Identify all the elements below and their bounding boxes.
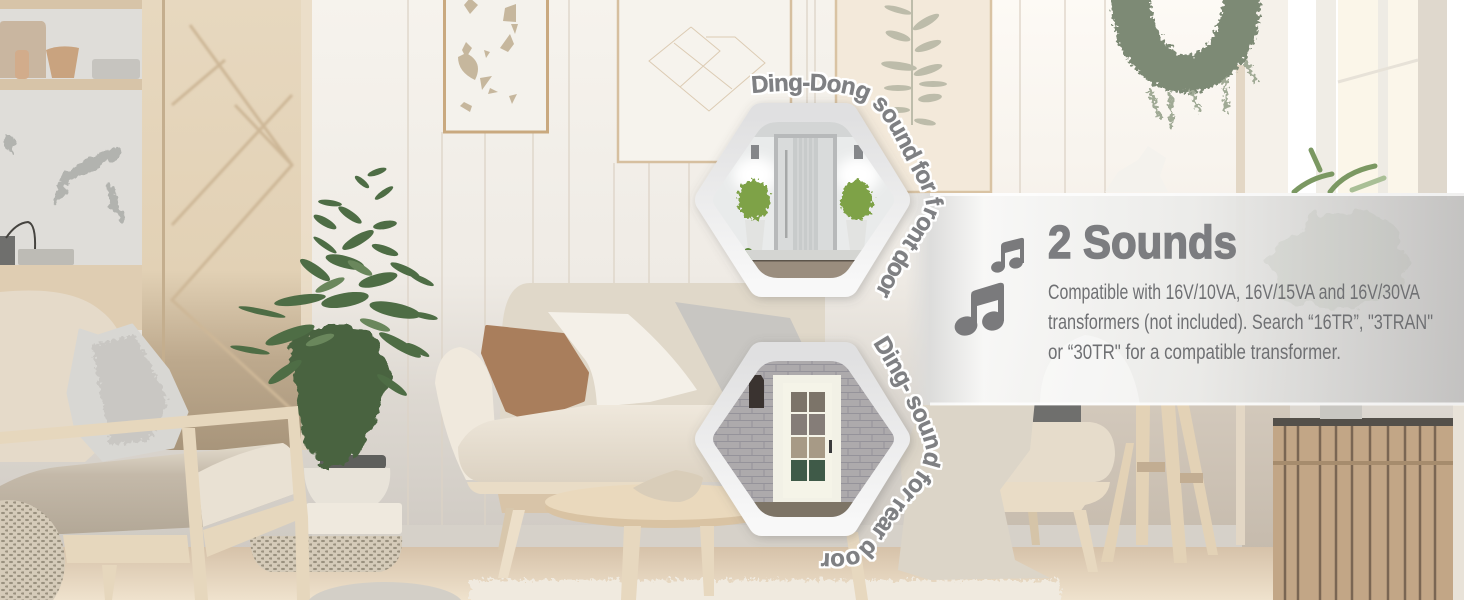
grey pillow	[675, 302, 825, 397]
chair cushion	[0, 443, 297, 534]
rug	[470, 580, 1060, 600]
ottoman edge	[307, 582, 463, 600]
icon: large music note	[952, 283, 1006, 338]
white pillow	[548, 312, 697, 407]
rear door photo	[713, 361, 894, 517]
window plant	[1294, 150, 1384, 192]
right sofa pillow	[1033, 405, 1081, 425]
coffee table	[545, 470, 868, 600]
chair pillow pattern	[92, 335, 168, 445]
faded plant behind panel	[1270, 210, 1406, 308]
sofa front leg	[498, 510, 525, 578]
floor	[0, 547, 1464, 600]
art frame 2 with diamond line art	[618, 0, 791, 162]
panel: 2 Sounds	[905, 193, 1464, 405]
sofa left arm	[435, 347, 495, 480]
right wall	[990, 0, 1290, 550]
panel edges	[930, 194, 1464, 404]
wreath	[1112, 0, 1260, 128]
faded sofa behind panel	[1040, 335, 1140, 405]
stone step	[754, 502, 853, 517]
wall lamps	[751, 145, 863, 159]
art frame 3	[836, 0, 991, 192]
heading: 2 Sounds	[1048, 216, 1237, 268]
window	[1245, 0, 1464, 200]
stool	[1101, 405, 1218, 563]
icon: small music note	[990, 238, 1024, 274]
front door photo	[730, 122, 881, 278]
art frame 1	[444, 0, 548, 132]
panel left fade	[905, 193, 930, 405]
hexagon frame: front door	[700, 115, 900, 285]
armchair	[0, 290, 310, 600]
blanket	[898, 400, 1050, 580]
panel background	[930, 193, 1464, 405]
sofa	[435, 283, 825, 578]
sofa seat cushion	[458, 405, 720, 482]
sofa back	[500, 283, 825, 420]
curved caption: rear door: Ding- sound for rear door	[818, 334, 943, 569]
right sofa cushion and base	[1000, 422, 1115, 572]
potted plants	[745, 220, 867, 250]
door glass	[791, 392, 825, 412]
door	[774, 134, 837, 250]
kettle and tray	[0, 222, 74, 265]
sofa rear leg	[498, 508, 514, 550]
scattered wall leaves	[1, 133, 126, 227]
body text	[1048, 281, 1433, 364]
step	[746, 250, 862, 260]
alcove shelves	[0, 0, 142, 90]
right wall edge	[1453, 405, 1464, 600]
shelf items	[0, 21, 140, 79]
baseboard	[312, 525, 1242, 548]
chair pillow	[68, 325, 187, 460]
lantern	[749, 375, 764, 408]
hexagon ring	[709, 356, 896, 522]
hexagon ring	[709, 117, 896, 283]
chair cushion front	[197, 443, 297, 527]
chair wood frame	[0, 406, 310, 600]
chair back	[0, 290, 125, 462]
door handle	[829, 440, 832, 453]
brown pillow	[483, 327, 587, 420]
plant pot, books and basket	[250, 455, 402, 572]
round slatted basket	[1273, 405, 1453, 600]
lamp	[1105, 146, 1168, 192]
pouf	[0, 500, 65, 600]
wall panel lines	[408, 0, 1105, 525]
curved caption: front door: Ding-Dong sound for front door	[750, 72, 946, 300]
fern	[881, 0, 947, 127]
door frame	[773, 375, 841, 502]
left alcove wall	[0, 0, 143, 270]
sofa base	[467, 482, 700, 494]
hexagon frame: rear door	[700, 355, 900, 522]
counter	[0, 265, 142, 330]
table legs	[621, 526, 868, 600]
body text: or “30TR" for a compatible transformer.	[1048, 341, 1341, 364]
bowl on table	[633, 470, 703, 502]
wall corner post	[1236, 65, 1245, 545]
large plant	[230, 166, 438, 462]
barn door	[142, 0, 312, 450]
